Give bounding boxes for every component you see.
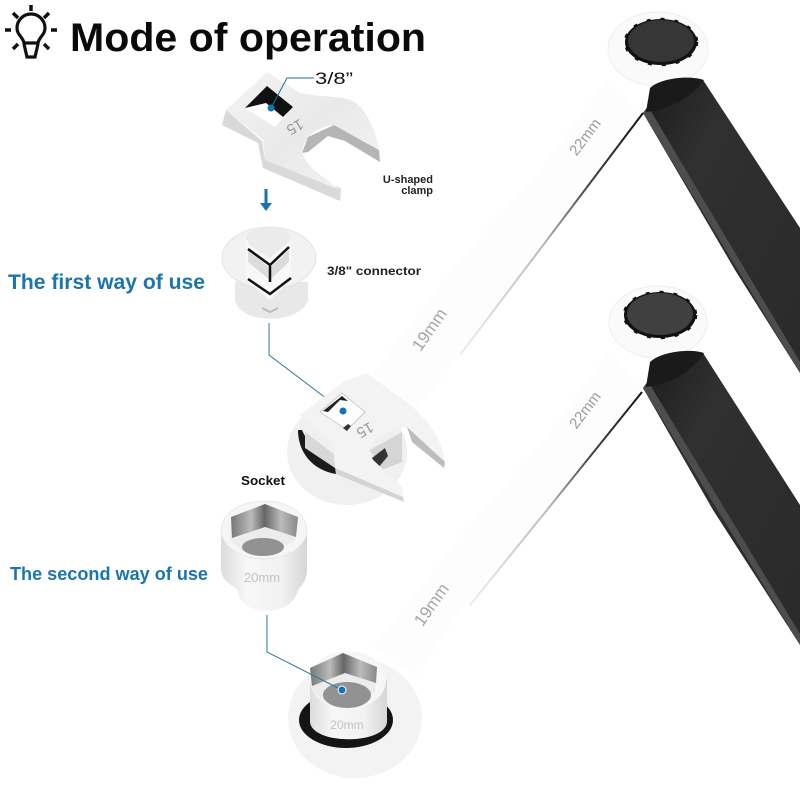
clamp size marking: 15 — [353, 418, 376, 441]
size marking 19mm: 19mm — [410, 580, 453, 630]
label: Socket: Socket — [241, 473, 286, 488]
title icon: light bulb — [5, 5, 57, 57]
bottom wrench — [288, 286, 800, 778]
title: Mode of operation — [70, 16, 426, 60]
top wrench — [373, 12, 800, 410]
socket leader line — [267, 615, 346, 694]
label: second way of use: The second way of use — [10, 563, 208, 584]
chrome shaft — [373, 350, 642, 677]
label: U-shaped clamp: clamp — [401, 185, 433, 197]
black handle — [643, 80, 800, 373]
ratchet recess — [624, 292, 696, 338]
mounted socket: 20mm — [330, 718, 364, 732]
black O-ring — [299, 692, 393, 748]
label: first way of use: The first way of use — [8, 271, 205, 294]
connector leader line — [269, 323, 343, 411]
arrow: down — [260, 189, 272, 211]
black handle — [643, 353, 800, 645]
label: U-shaped clamp: U-shaped — [383, 174, 433, 186]
square drive hole — [245, 86, 293, 127]
3/8 callout — [268, 69, 353, 112]
mounted assembly: ring head with clamp — [287, 373, 445, 505]
label: 3/8 connector: 3/8" connector — [327, 266, 422, 278]
ring head — [608, 12, 708, 86]
3/8 connector — [222, 226, 316, 319]
ring head — [609, 286, 707, 358]
chrome shaft — [373, 77, 643, 410]
size marking 22mm: 22mm — [566, 116, 605, 159]
socket — [221, 501, 307, 611]
clamp size marking: 15 — [283, 115, 306, 138]
ratchet recess — [625, 19, 697, 65]
square hole with connector — [320, 393, 365, 430]
size marking 19mm: 19mm — [408, 305, 451, 355]
lower ring head — [288, 658, 422, 778]
socket: 20mm — [244, 570, 280, 585]
size marking 22mm: 22mm — [566, 389, 605, 432]
3/8 callout: 3/8” — [315, 69, 353, 88]
U-shaped clamp — [222, 72, 380, 201]
mounted socket — [310, 651, 387, 739]
